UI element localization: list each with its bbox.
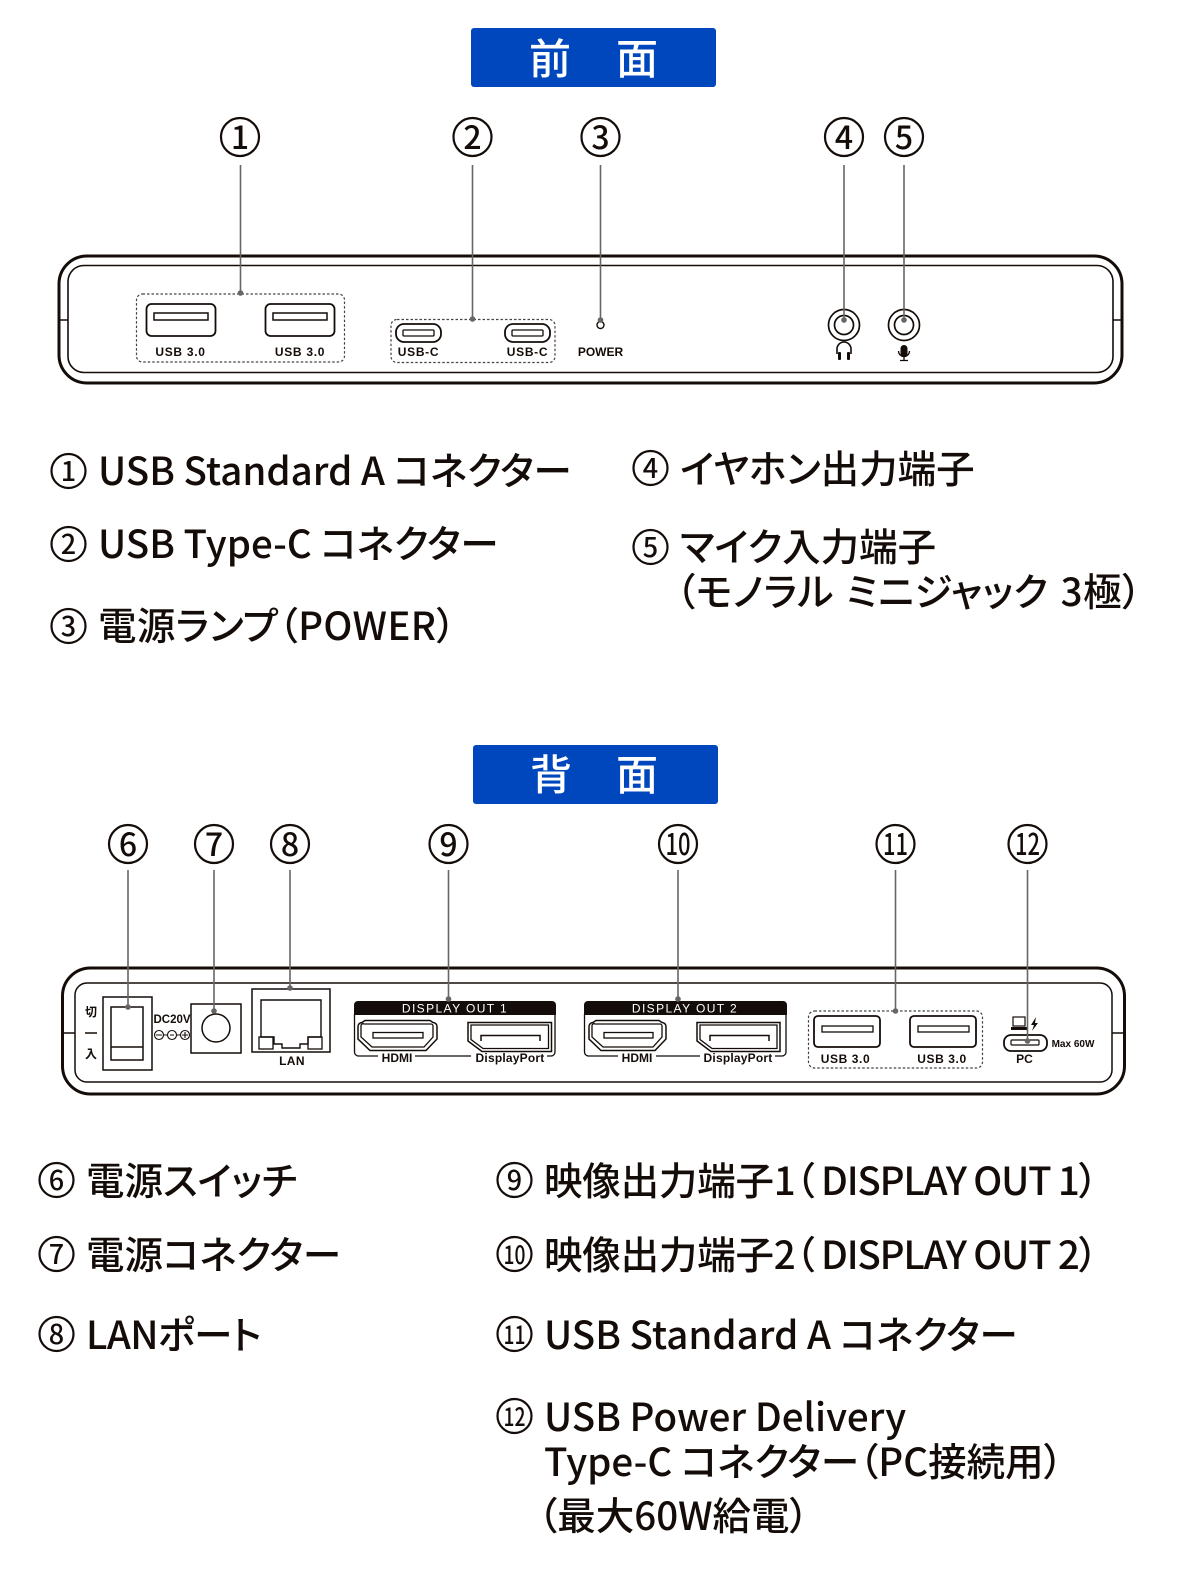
- front USB-A ports: USB 3.0: [155, 345, 206, 359]
- heading: back: 面: [616, 742, 658, 803]
- legend item 5: マイク入力端子: [680, 517, 936, 573]
- legend item 9: 9: [507, 1159, 522, 1198]
- callout 4: 4: [835, 113, 853, 159]
- power switch: 入: [85, 1047, 97, 1061]
- callout 6: [109, 820, 147, 1010]
- display out 1: HDMI: [382, 1051, 412, 1065]
- USB-C PC port: Max 60W: [1052, 1039, 1095, 1050]
- legend item 12: Type-C コネクター（PC接続用）: [544, 1432, 1063, 1488]
- legend item 2: USB Type-C コネクター: [98, 514, 499, 570]
- callout 2: 2: [463, 113, 482, 159]
- legend item 1: 1: [61, 450, 76, 489]
- power lamp: [578, 322, 623, 359]
- legend item 5: 5: [643, 526, 658, 565]
- legend item 7: 電源コネクター: [86, 1225, 341, 1281]
- power switch: [85, 997, 152, 1070]
- back USB-A ports: [808, 1011, 982, 1068]
- power switch: 切: [85, 1005, 97, 1019]
- display out 2: HDMI: [622, 1051, 652, 1065]
- legend item 10: DISPLAY OUT 2）: [821, 1225, 1097, 1281]
- callout 6: 6: [119, 820, 137, 866]
- display out 1: DISPLAY OUT 1: [402, 1002, 508, 1016]
- legend item 10: 映像出力端子2（: [544, 1225, 815, 1281]
- legend item 4: イヤホン出力端子: [680, 439, 975, 495]
- device: front panel: [59, 256, 1122, 383]
- front USB-C ports: USB-C: [507, 345, 548, 359]
- callout 8: [271, 820, 309, 991]
- display out 2: [584, 1001, 787, 1065]
- display out 1: DisplayPort: [476, 1051, 544, 1065]
- callout 10: [659, 820, 697, 1002]
- display out 1: [354, 1001, 556, 1065]
- legend item 3: 3: [61, 605, 76, 644]
- callout 2: [454, 113, 492, 322]
- callout 10: 10: [666, 820, 690, 864]
- legend item 9: DISPLAY OUT 1）: [821, 1151, 1097, 1207]
- callout 7: 7: [205, 820, 223, 866]
- legend item 11: USB Standard A コネクター: [544, 1305, 1018, 1361]
- callout 9: 9: [439, 820, 458, 866]
- microphone jack: [888, 310, 920, 360]
- heading: back: [473, 742, 718, 804]
- legend item 5: （モノラル ミニジャック 3極）: [676, 562, 1142, 618]
- callout 3: 3: [591, 113, 610, 159]
- legend item 10: 10: [504, 1236, 526, 1272]
- front USB-A ports: [136, 294, 344, 362]
- power lamp: POWER: [578, 345, 623, 359]
- display out 2: DISPLAY OUT 2: [632, 1002, 738, 1016]
- callout 1: 1: [231, 113, 249, 159]
- LAN port: LAN: [279, 1054, 305, 1068]
- front USB-C ports: [391, 320, 555, 362]
- LAN port: [252, 989, 330, 1068]
- legend item 12: 12: [504, 1398, 526, 1434]
- back USB-A ports: USB 3.0: [821, 1052, 870, 1066]
- legend item 6: 電源スイッチ: [86, 1151, 297, 1207]
- callout 12: [1008, 820, 1046, 1044]
- DC jack: DC20V: [153, 1014, 191, 1026]
- legend item 8: LANポート: [86, 1305, 261, 1361]
- USB-C PC port: [1004, 1017, 1095, 1066]
- callout 11: [876, 820, 914, 1014]
- callout 7: [195, 820, 233, 1014]
- back USB-A ports: USB 3.0: [917, 1052, 967, 1066]
- legend item 11: 11: [504, 1316, 526, 1352]
- legend item 5: [634, 517, 1142, 618]
- heading: front: 面: [616, 26, 658, 87]
- callout 4: [825, 113, 863, 323]
- earphone jack: [828, 310, 860, 360]
- legend item 6: 6: [49, 1159, 64, 1198]
- front USB-A ports: USB 3.0: [275, 345, 325, 359]
- legend item 9: 映像出力端子1（: [544, 1151, 815, 1207]
- display out 2: DisplayPort: [704, 1051, 772, 1065]
- DC jack: [153, 1004, 241, 1053]
- heading: front: 前: [529, 26, 571, 87]
- legend item 12: （最大60W給電）: [538, 1486, 809, 1542]
- callout 11: 11: [883, 820, 908, 864]
- legend item 12: USB Power Delivery: [544, 1387, 906, 1443]
- USB-C PC port: PC: [1016, 1052, 1033, 1066]
- legend item 3: 電源ランプ（POWER）: [98, 596, 456, 652]
- legend item 4: 4: [643, 447, 658, 486]
- legend item 8: 8: [49, 1313, 64, 1352]
- legend item 1: USB Standard A コネクター: [98, 441, 572, 497]
- legend item 2: 2: [61, 523, 76, 562]
- heading: back: 背: [530, 742, 572, 803]
- front USB-C ports: USB-C: [398, 345, 439, 359]
- callout 12: 12: [1015, 820, 1040, 864]
- legend item 10: [498, 1225, 1097, 1281]
- callout 1: [221, 113, 259, 296]
- heading: front: [471, 26, 716, 87]
- legend item 7: 7: [49, 1233, 64, 1272]
- device: back panel: [62, 968, 1125, 1094]
- callout 9: [430, 820, 468, 1002]
- callout 8: 8: [281, 820, 299, 866]
- legend item 12: [498, 1387, 1063, 1542]
- callout 5: [885, 113, 923, 323]
- callout 5: 5: [895, 113, 913, 159]
- legend item 9: [498, 1151, 1097, 1207]
- callout 3: [582, 113, 620, 323]
